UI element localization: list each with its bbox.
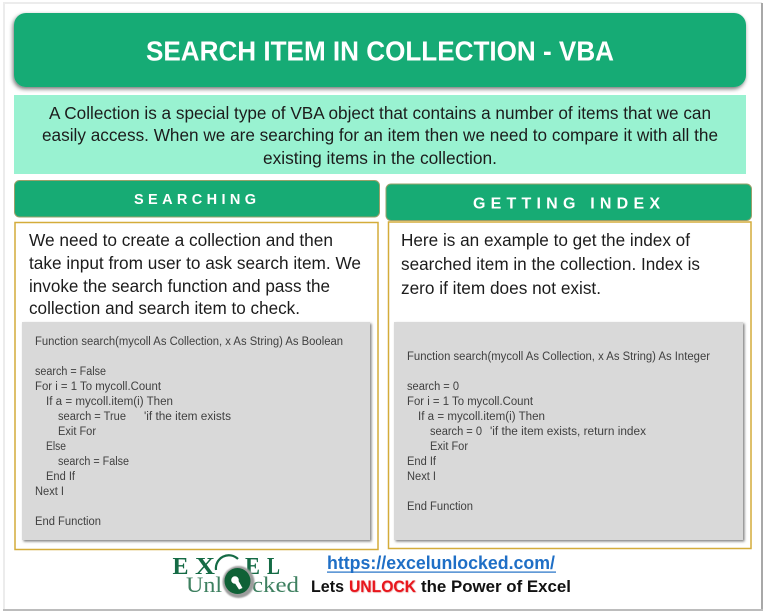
code box: index function: Exit For	[430, 441, 468, 453]
title banner: SEARCH ITEM IN COLLECTION - VBA	[146, 36, 614, 66]
heading: getting index: GETTING INDEX	[473, 196, 660, 212]
code box: search function: search = False	[58, 456, 129, 468]
code box: index function: For i = 1 To mycoll.Count	[407, 396, 534, 408]
getting index description	[401, 230, 700, 298]
searching description	[29, 230, 361, 318]
searching description: collection and search item to check.	[29, 298, 300, 318]
code box: search function: Next I	[35, 486, 64, 498]
tagline: Lets	[311, 577, 344, 596]
tagline: UNLOCK	[349, 577, 417, 596]
intro description panel: easily access. When we are searching for an item then we need to compare it with all the	[42, 125, 718, 145]
logo: Excel Unlocked	[172, 554, 299, 598]
code box: search function: End If	[46, 471, 76, 483]
searching description: take input from user to ask search item. We	[29, 253, 361, 273]
code box: index function: Function search(mycoll As Collection, x As String) As Integer	[407, 351, 710, 363]
getting index description: zero if item does not exist.	[401, 278, 601, 298]
searching description: We need to create a collection and then	[29, 230, 333, 250]
searching description: invoke the search function and pass the	[29, 276, 330, 296]
code box: search function: Else	[46, 441, 66, 453]
intro description panel	[14, 95, 746, 174]
code box: index function: search = 0	[430, 426, 482, 438]
tagline	[311, 577, 571, 596]
getting index description: searched item in the collection. Index is	[401, 254, 700, 274]
code box: index function: End If	[407, 456, 437, 468]
code box: search function: If a = mycoll.item(i) Then	[46, 396, 173, 408]
code box: search function: Exit For	[58, 426, 96, 438]
code box: search function: Function search(mycoll As Collection, x As String) As Boolean	[35, 336, 343, 348]
code box: index function: 'if the item exists, return index	[490, 426, 646, 438]
logo: Excel Unlocked: E	[245, 554, 260, 580]
logo: Excel Unlocked: L	[267, 554, 280, 580]
logo: Excel Unlocked: Unl	[186, 572, 222, 597]
panel: getting index	[388, 222, 751, 548]
code box: index function	[394, 322, 743, 540]
code box: index function: search = 0	[407, 381, 459, 393]
code box: index function: If a = mycoll.item(i) Then	[418, 411, 545, 423]
code box: search function: search = False	[35, 366, 106, 378]
heading: searching	[14, 180, 380, 217]
code box: search function: For i = 1 To mycoll.Count	[35, 381, 162, 393]
code box: index function: Next I	[407, 471, 436, 483]
getting index description: Here is an example to get the index of	[401, 230, 690, 250]
tagline: the Power of Excel	[421, 577, 571, 596]
intro description panel: A Collection is a special type of VBA object that contains a number of items that we can	[49, 103, 711, 123]
code box: search function: End Function	[35, 516, 101, 528]
code box: search function: search = True	[58, 411, 126, 423]
website link: https://excelunlocked.com/	[327, 553, 555, 573]
heading: getting index	[386, 184, 752, 220]
code box: search function	[22, 322, 370, 540]
code box: index function: End Function	[407, 501, 473, 513]
panel: searching	[15, 222, 378, 550]
code box: search function: 'if the item exists	[144, 411, 231, 423]
logo: Excel Unlocked: E	[172, 554, 188, 580]
title banner	[14, 13, 746, 87]
logo: Excel Unlocked: cked	[252, 572, 299, 597]
heading: searching: SEARCHING	[134, 192, 256, 208]
intro description panel: existing items in the collection.	[263, 148, 497, 168]
logo: Excel Unlocked: X	[195, 554, 216, 580]
